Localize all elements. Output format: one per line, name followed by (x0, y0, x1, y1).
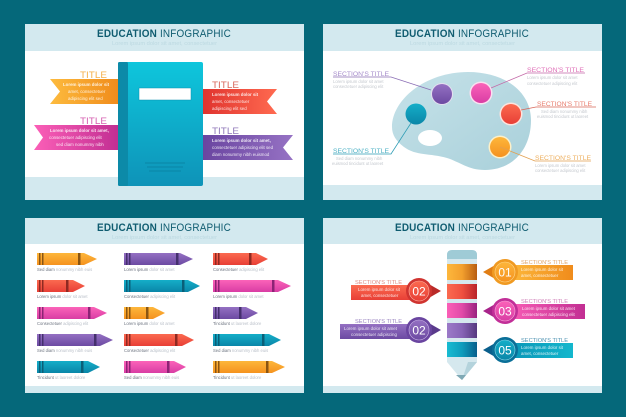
footer band (323, 185, 602, 200)
panel: pencil (323, 218, 602, 393)
crayon: pink 2: Sed diam nonummy nibh euis (124, 375, 179, 380)
crayon: purple 1: Sed diam nonummy nibh euis (37, 348, 92, 353)
ribbon: pink (34, 116, 118, 150)
crayon: red 1: Lorem ipsum dolor sit amet (37, 294, 88, 299)
icon: pencil (447, 250, 477, 380)
crayon: purple 2: Lorem ipsum dolor sit amet (124, 267, 175, 272)
header band (25, 24, 304, 51)
step: 05 blue: amet, consectetuer (521, 351, 559, 356)
step: 02 purple: Lorem ipsum dolor sit amet (344, 326, 398, 331)
step: 03 pink (483, 298, 585, 324)
ribbon: purple: TITLE (212, 126, 239, 137)
step: 01 orange: amet, consectetuer (521, 273, 559, 278)
step: 03 pink: Lorem ipsum dolor sit amet (522, 306, 576, 311)
ribbon: orange: Lorem ipsum dolor sit (63, 82, 110, 87)
crayon: purple 2 (124, 253, 193, 272)
crayon: red 1 (37, 280, 88, 299)
ribbon: red: Lorem ipsum dolor sit (212, 92, 259, 97)
callout: blue section (332, 123, 411, 166)
title: EDUCATION INFOGRAPHIC (97, 28, 231, 40)
crayon: red 2 (124, 334, 194, 353)
callout: orange section (500, 147, 592, 173)
step: 05 blue: Lorem ipsum dolor sit (521, 345, 564, 350)
ribbon: red: amet, consectetuer (212, 99, 250, 104)
crayon: orange 2: Lorem ipsum dolor sit amet (124, 321, 175, 326)
step: 02 purple: 02 (412, 324, 426, 338)
crayon: purple 3 (213, 307, 262, 326)
crayon: blue 2 (124, 280, 200, 299)
ribbon: pink: sed diam nonummy nibh (56, 142, 104, 147)
panel: book ribbons (25, 24, 304, 200)
crayon: pink 3: Lorem ipsum dolor sit amet (213, 294, 264, 299)
step: 02 purple: SECTION'S TITLE (355, 319, 403, 325)
panel background (323, 218, 602, 393)
crayon: blue 1: Tincidunt ut laoreet dolore (37, 375, 86, 380)
ribbon: pink: Lorem ipsum dolor sit amet, (50, 128, 109, 133)
ribbon: red (203, 80, 277, 114)
callout: red section: euismod tincidunt ut laoreet (537, 114, 589, 119)
title: EDUCATION INFOGRAPHIC (395, 222, 529, 234)
callout: red section (521, 101, 596, 119)
step: 03 pink: 03 (498, 304, 512, 318)
footer band (25, 386, 304, 393)
icon: palette (392, 72, 531, 170)
panel: palette (323, 24, 602, 200)
crayon: pink 1 (37, 307, 107, 326)
callout: purple section: consectetuer adipiscing elit (333, 84, 384, 89)
crayon: orange 2 (124, 307, 175, 326)
callout: red section: SECTION'S TITLE (537, 101, 593, 108)
step: 01 orange (483, 259, 573, 285)
footer band (25, 177, 304, 200)
step: 05 blue: SECTION'S TITLE (521, 338, 569, 344)
ribbon: orange: adipiscing elit sed (68, 96, 103, 101)
step: 02 red: SECTION'S TITLE (355, 280, 403, 286)
ribbon: purple (203, 126, 293, 160)
step: 02 purple: consectetuer adipiscing (351, 332, 397, 337)
ribbon: purple: diam nonummy nibh euismod (212, 152, 270, 157)
ribbon: purple: Lorem ipsum dolor sit amet, (212, 138, 271, 143)
crayon: purple 1 (37, 334, 113, 353)
ribbon: pink: TITLE (80, 116, 107, 127)
step: 01 orange: SECTION'S TITLE (521, 260, 569, 266)
callout: pink section: Lorem ipsum dolor sit amet (527, 75, 578, 80)
crayon: orange 1 (37, 253, 97, 272)
ribbon: orange: TITLE (80, 70, 107, 81)
callout: pink section: SECTION'S TITLE (527, 67, 585, 74)
ribbon: red: TITLE (212, 80, 239, 91)
icon: book (118, 62, 203, 186)
callout: orange section: consectetuer adipiscing elit (535, 168, 586, 173)
step: 02 purple (340, 317, 441, 343)
ribbon: purple: consectetuer adipiscing elit sed (212, 145, 274, 150)
panel background (323, 24, 602, 200)
callout: orange section: Lorem ipsum dolor sit amet (535, 163, 586, 168)
title: EDUCATION INFOGRAPHIC (97, 222, 231, 234)
ribbon: red: adipiscing elit sed (212, 106, 247, 111)
callout: pink section: consectetuer adipiscing elit (527, 81, 578, 86)
callout: orange section: SECTION'S TITLE (535, 155, 592, 162)
subtitle: Lorem ipsum dolor sit amet, consectetuer (112, 235, 217, 241)
crayon: blue 3 (213, 334, 281, 353)
subtitle: Lorem ipsum dolor sit amet, consectetuer (410, 235, 515, 241)
step: 02 red: Lorem ipsum dolor sit (358, 287, 401, 292)
step: 05 blue: 05 (498, 344, 512, 358)
step: 02 red (351, 278, 441, 304)
callout: blue section: Sed diam nonummy nibh (336, 156, 383, 161)
callout: red section: Sed diam nonummy nibh (541, 109, 588, 114)
callout: purple section: SECTION'S TITLE (333, 71, 390, 78)
ribbon: orange: amet, consectetuer (68, 89, 106, 94)
crayon: pink 3 (213, 280, 291, 299)
crayon: blue 2: Consectetuer adipiscing elit (124, 294, 176, 299)
step: 05 blue (483, 337, 573, 363)
crayon: blue 3: Sed diam nonummy nibh euis (213, 348, 268, 353)
crayon: pink 2 (124, 361, 186, 380)
step: 01 orange: 01 (498, 266, 512, 280)
header band (323, 218, 602, 244)
crayon: orange 3 (213, 361, 285, 380)
panel background (25, 218, 304, 393)
step: 02 red: 02 (412, 284, 426, 298)
callout: purple section (333, 71, 431, 90)
subtitle: Lorem ipsum dolor sit amet, consectetuer (112, 41, 217, 47)
step: 01 orange: Lorem ipsum dolor sit (521, 267, 564, 272)
crayon: orange 1: Sed diam nonummy nibh euis (37, 267, 92, 272)
crayon: red 2: Consectetuer adipiscing elit (124, 348, 176, 353)
ribbon: orange (50, 70, 118, 104)
callout: blue section: euismod tincidunt ut laoreet (332, 161, 384, 166)
crayon: red 3 (213, 253, 268, 272)
header band (25, 218, 304, 244)
header band (323, 24, 602, 51)
crayon: red 3: Consectetuer adipiscing elit (213, 267, 265, 272)
footer band (323, 386, 602, 393)
callout: purple section: Lorem ipsum dolor sit amet (333, 79, 384, 84)
ribbon: pink: consectetuer adipiscing elit (49, 135, 102, 140)
crayon: blue 1 (37, 361, 100, 380)
title: EDUCATION INFOGRAPHIC (395, 28, 529, 40)
callout: blue section: SECTION'S TITLE (333, 148, 390, 155)
panel: crayons (25, 218, 304, 393)
subtitle: Lorem ipsum dolor sit amet, consectetuer (410, 41, 515, 47)
panel background (25, 24, 304, 200)
crayon: orange 3: Tincidunt ut laoreet dolore (213, 375, 262, 380)
crayon: pink 1: Consectetuer adipiscing elit (37, 321, 89, 326)
crayon: purple 3: Tincidunt ut laoreet dolore (213, 321, 262, 326)
callout: pink section (491, 67, 585, 88)
step: 03 pink: consectetuer adipiscing elit (522, 312, 575, 317)
step: 02 red: amet, consectetuer (361, 293, 399, 298)
step: 03 pink: SECTION'S TITLE (521, 299, 569, 305)
